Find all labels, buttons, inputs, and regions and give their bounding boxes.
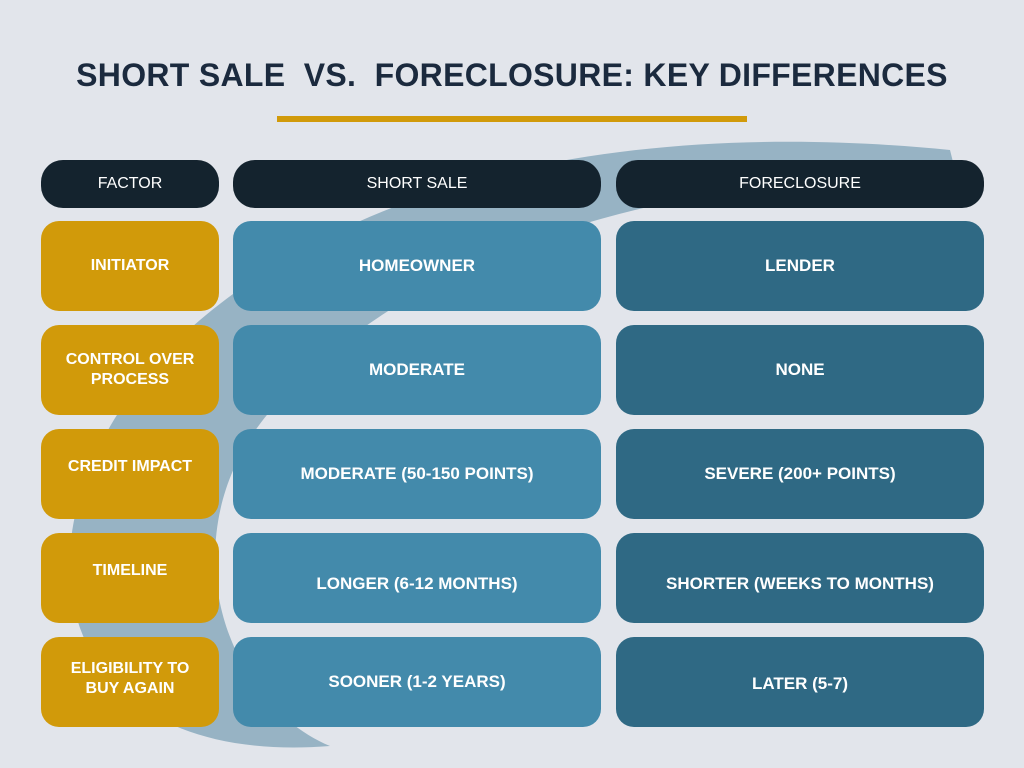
row 5 short sale: SOONER (1-2 YEARS) xyxy=(328,672,506,691)
header: factor: FACTOR xyxy=(98,175,162,192)
row 2 factor: PROCESS xyxy=(91,371,169,388)
row 2 factor: CONTROL OVER xyxy=(66,351,194,368)
row 3 short sale xyxy=(233,429,601,519)
row 3 foreclosure xyxy=(616,429,984,519)
row 2 short sale: MODERATE xyxy=(369,360,465,379)
row 1 factor xyxy=(41,221,219,311)
header: short sale xyxy=(233,160,601,208)
row 5 factor: BUY AGAIN xyxy=(86,680,174,697)
row 4 foreclosure xyxy=(616,533,984,623)
row 3 short sale: MODERATE (50-150 POINTS) xyxy=(300,464,534,483)
row 5 factor: ELIGIBILITY TO xyxy=(71,660,189,677)
row 1 factor: INITIATOR xyxy=(91,257,169,274)
row 4 factor xyxy=(41,533,219,623)
row 2 foreclosure: NONE xyxy=(775,360,825,379)
title: SHORT SALE VS. FORECLOSURE: KEY DIFFERENCES xyxy=(76,57,948,93)
row 2 short sale xyxy=(233,325,601,415)
row 4 foreclosure: SHORTER (WEEKS TO MONTHS) xyxy=(666,574,934,593)
row 3 factor xyxy=(41,429,219,519)
row 4 short sale xyxy=(233,533,601,623)
row 5 foreclosure: LATER (5-7) xyxy=(752,674,848,693)
row 2 foreclosure xyxy=(616,325,984,415)
row 4 factor: TIMELINE xyxy=(93,562,167,579)
header: foreclosure: FORECLOSURE xyxy=(739,175,861,192)
header: short sale: SHORT SALE xyxy=(367,175,467,192)
row 2 factor xyxy=(41,325,219,415)
row 4 short sale: LONGER (6-12 MONTHS) xyxy=(316,574,518,593)
row 1 foreclosure: LENDER xyxy=(765,256,835,275)
row 5 short sale xyxy=(233,637,601,727)
row 5 foreclosure xyxy=(616,637,984,727)
row 3 foreclosure: SEVERE (200+ POINTS) xyxy=(704,464,896,483)
row 1 foreclosure xyxy=(616,221,984,311)
header: foreclosure xyxy=(616,160,984,208)
row 5 factor xyxy=(41,637,219,727)
row 1 short sale xyxy=(233,221,601,311)
title underline xyxy=(277,116,747,122)
row 3 factor: CREDIT IMPACT xyxy=(68,458,192,475)
header: factor xyxy=(41,160,219,208)
row 1 short sale: HOMEOWNER xyxy=(359,256,475,275)
